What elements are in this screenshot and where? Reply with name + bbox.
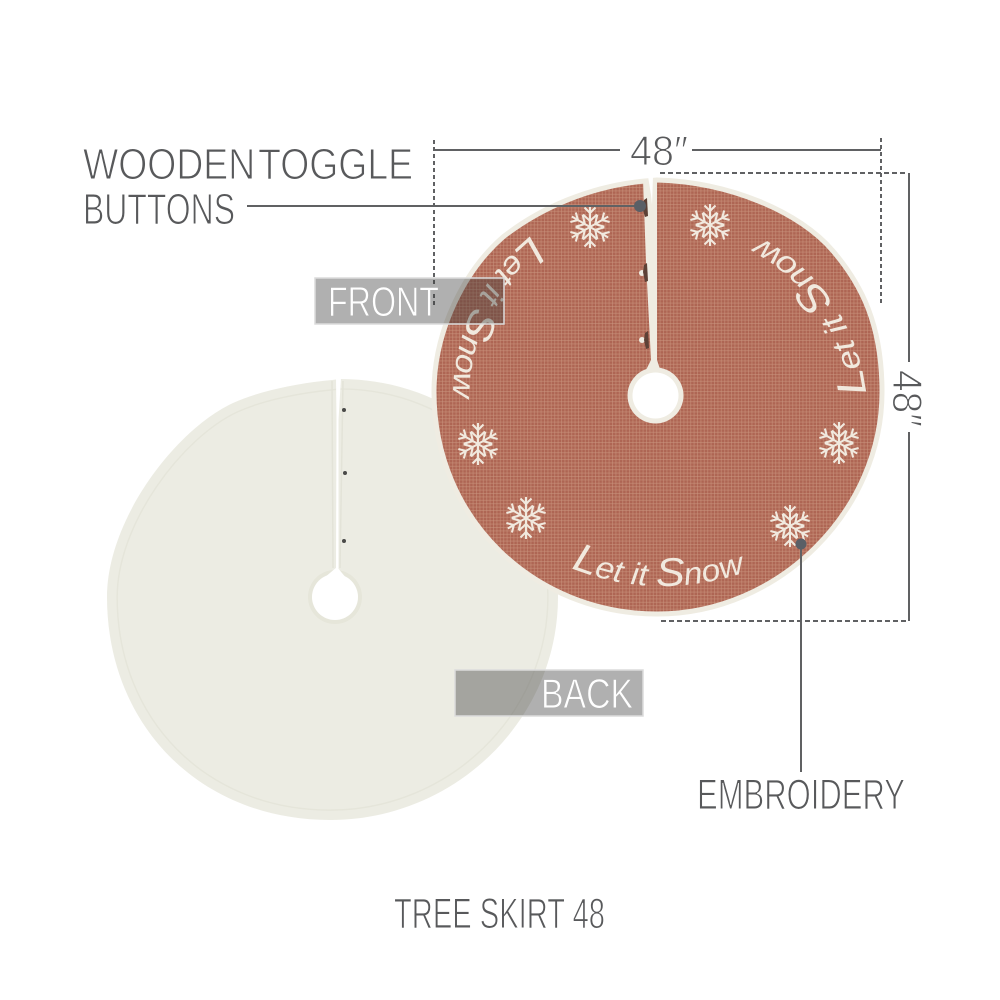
height value: 48″: [884, 370, 931, 427]
width value: 48″: [630, 127, 688, 174]
embroidered text left: Let it Snow: [453, 236, 544, 400]
back centre hole: [308, 570, 362, 624]
front centre hole: [628, 368, 684, 424]
label: front: FRONT: [328, 278, 439, 325]
label: back: [455, 670, 643, 717]
callout: wooden toggle buttons: [83, 140, 646, 234]
embroidered text right: Let it Snow: [750, 241, 866, 392]
callout: embroidery: [697, 538, 905, 819]
back of tree skirt: [107, 378, 558, 820]
callout: wooden toggle buttons: BUTTONS: [83, 185, 235, 234]
front slit trim: [643, 178, 661, 372]
width dimension: [434, 127, 881, 306]
callout: wooden toggle buttons: WOODEN TOGGLE: [83, 140, 413, 189]
back button holes: [342, 408, 347, 543]
back slit: [336, 378, 341, 572]
height dimension: [660, 173, 931, 621]
front of tree skirt: [432, 178, 884, 616]
caption: TREE SKIRT 48: [394, 890, 605, 938]
snowflake embroidery: [456, 204, 861, 547]
label: back: BACK: [541, 670, 633, 717]
embroidered text bottom: Let it Snow: [572, 544, 742, 586]
callout: embroidery: EMBROIDERY: [697, 771, 905, 819]
wooden toggle buttons: [639, 198, 649, 349]
